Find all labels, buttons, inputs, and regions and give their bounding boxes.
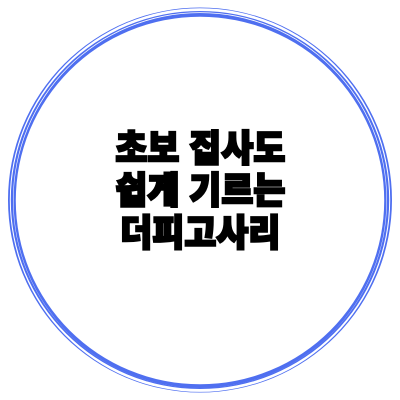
title: 초보 집사도 <box>115 129 286 169</box>
title: 더피고사리 <box>120 214 281 254</box>
title: 쉽게 기르는 <box>115 171 286 211</box>
title <box>115 129 286 254</box>
